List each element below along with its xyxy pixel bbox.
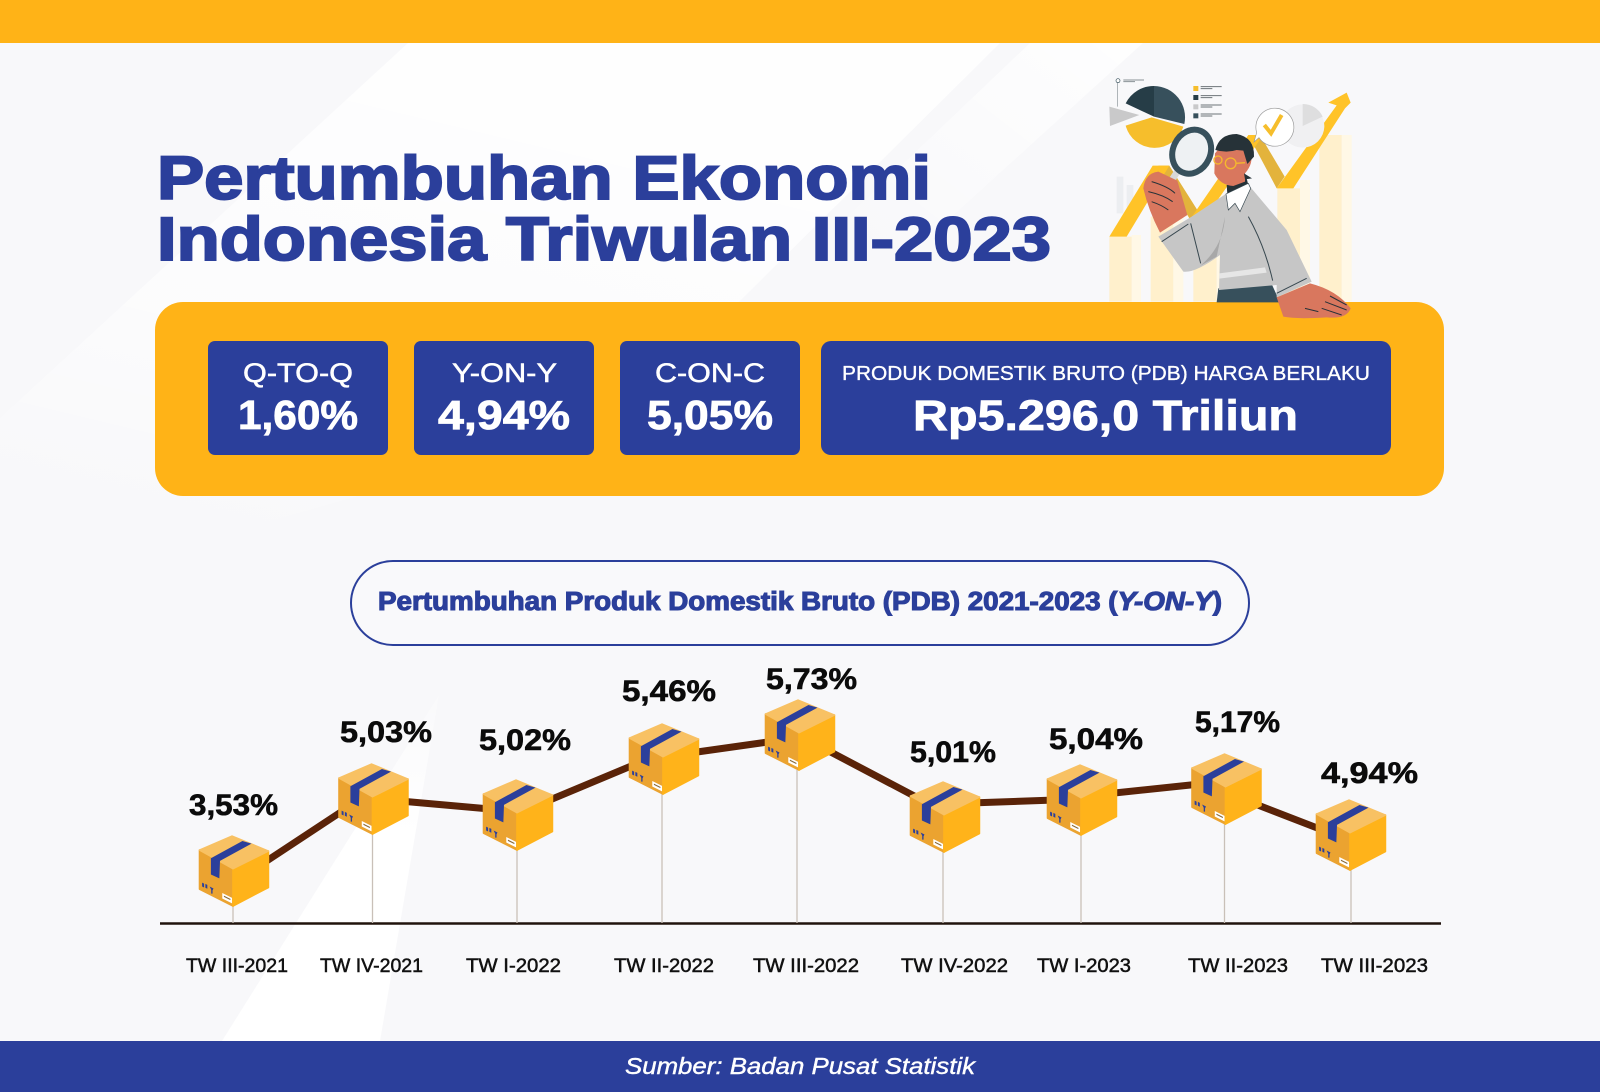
chart heading pill: [351, 561, 1249, 645]
point: TW II-2022: 5,46%: [622, 675, 716, 708]
footer: Sumber: Badan Pusat Statistik: [625, 1053, 977, 1079]
x-axis labels: TW I-2023: [1037, 955, 1131, 977]
stat: nominal GDP: [821, 341, 1391, 455]
title: Pertumbuhan Ekonomi: [157, 144, 931, 212]
pie chart: [1109, 79, 1185, 148]
x-axis labels: TW II-2023: [1188, 955, 1288, 977]
point: TW IV-2021: 5,03%: [340, 716, 432, 749]
point: TW IV-2021: [339, 716, 432, 923]
stat: q-to-q: Q-TO-Q: [243, 358, 353, 388]
x-axis labels: TW IV-2021: [320, 955, 423, 977]
faint pie: [1281, 104, 1324, 148]
hair: [1215, 134, 1254, 179]
point: TW IV-2022: 5,01%: [910, 736, 996, 769]
stat: nominal GDP: PRODUK DOMESTIK BRUTO (PDB) HARGA BERLAKU: [842, 362, 1370, 385]
stat: q-to-q: [208, 341, 388, 455]
raised hand: [1143, 172, 1187, 233]
point: TW III-2023: [1317, 757, 1418, 923]
person: [1143, 123, 1351, 318]
trend line: [250, 741, 1325, 872]
x-axis labels: TW III-2023: [1321, 955, 1428, 977]
chart heading pill: Pertumbuhan Produk Domestik Bruto (PDB) 2021-2023 ( Y-ON-Y ): [378, 588, 1222, 616]
point: TW IV-2022: [910, 736, 996, 923]
point: TW III-2021: [189, 789, 278, 923]
point: TW II-2023: 5,17%: [1195, 706, 1280, 739]
speech bubble with check: [1254, 108, 1294, 146]
axis: [160, 922, 1441, 925]
x-axis labels: TW III-2021: [186, 955, 288, 977]
point: TW III-2023: 4,94%: [1321, 757, 1418, 790]
point: TW III-2021: 3,53%: [189, 789, 278, 822]
stat: y-on-y: 4,94%: [438, 392, 570, 438]
stat: c-on-c: C-ON-C: [655, 358, 765, 388]
x-axis labels: TW IV-2022: [901, 955, 1008, 977]
point: TW III-2022: 5,73%: [766, 663, 857, 696]
trousers: [1217, 284, 1280, 302]
glasses: [1214, 156, 1245, 169]
stat: q-to-q: 1,60%: [238, 392, 358, 438]
pale background bars: [1109, 135, 1352, 302]
point: TW II-2023: [1192, 706, 1280, 923]
resting hand: [1277, 283, 1351, 318]
point: TW I-2022: 5,02%: [479, 724, 571, 757]
title: Indonesia Triwulan III-2023: [157, 205, 1051, 273]
x-axis labels: [186, 955, 1428, 977]
footer: [0, 1041, 1600, 1092]
point: TW I-2023: [1048, 723, 1143, 923]
stat: c-on-c: 5,05%: [647, 392, 773, 438]
stat: y-on-y: [414, 341, 594, 455]
point: TW I-2022: [479, 724, 571, 923]
x-axis labels: TW III-2022: [753, 955, 859, 977]
neck: [1227, 178, 1248, 194]
point: TW III-2022: [766, 663, 857, 923]
illustration: analyst with magnifier: [1109, 79, 1352, 318]
legend: [1193, 86, 1222, 118]
stat: y-on-y: Y-ON-Y: [452, 358, 557, 388]
magnifier: [1165, 123, 1218, 182]
collar: [1226, 183, 1251, 212]
x-axis labels: TW I-2022: [466, 955, 561, 977]
top band: [0, 0, 1600, 43]
growth arrow: [1109, 93, 1351, 237]
point: TW I-2023: 5,04%: [1049, 723, 1143, 756]
panel: key indicators: [155, 302, 1444, 496]
x-axis labels: TW II-2022: [614, 955, 714, 977]
face: [1214, 143, 1252, 186]
sweater: [1158, 187, 1312, 297]
line chart: GDP growth y-on-y: [160, 663, 1441, 977]
stat: nominal GDP: Rp5.296,0 Triliun: [913, 392, 1298, 440]
stat: c-on-c: [620, 341, 800, 455]
title: [157, 144, 1051, 273]
point: TW II-2022: [622, 675, 716, 923]
